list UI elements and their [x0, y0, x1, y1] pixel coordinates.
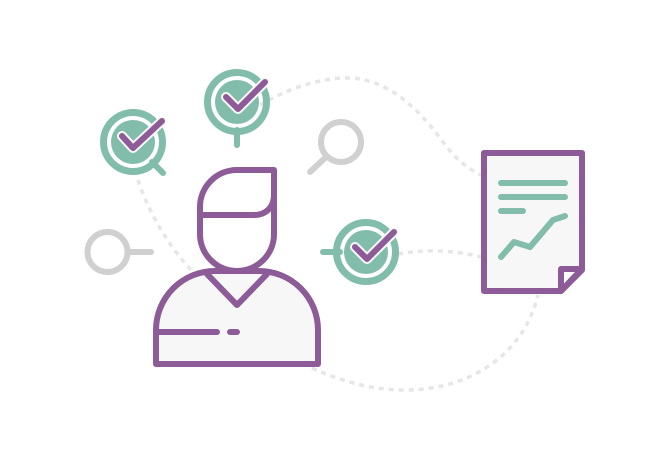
- person hair line: [200, 195, 274, 215]
- document page: [484, 153, 582, 291]
- dotted connector: right check to report: [398, 251, 481, 257]
- dotted connector: top check to report: [260, 78, 481, 175]
- person head: [200, 170, 274, 271]
- icon: check magnifier right: [323, 222, 396, 282]
- document text lines: [501, 183, 565, 211]
- icon: gray magnifier left: [88, 232, 151, 272]
- document fold: [561, 269, 582, 291]
- person: [156, 170, 318, 364]
- report document: [484, 153, 582, 291]
- person arm line: [156, 329, 237, 335]
- icon: check magnifier top: [208, 72, 266, 145]
- person body: [156, 271, 318, 364]
- dotted connector: person to report: [312, 295, 538, 390]
- document line chart: [501, 216, 565, 257]
- icon: check magnifier left: [104, 112, 163, 173]
- dotted connector: left check to person: [138, 180, 192, 271]
- person collar: [207, 274, 267, 305]
- icon: gray magnifier upper: [310, 122, 361, 172]
